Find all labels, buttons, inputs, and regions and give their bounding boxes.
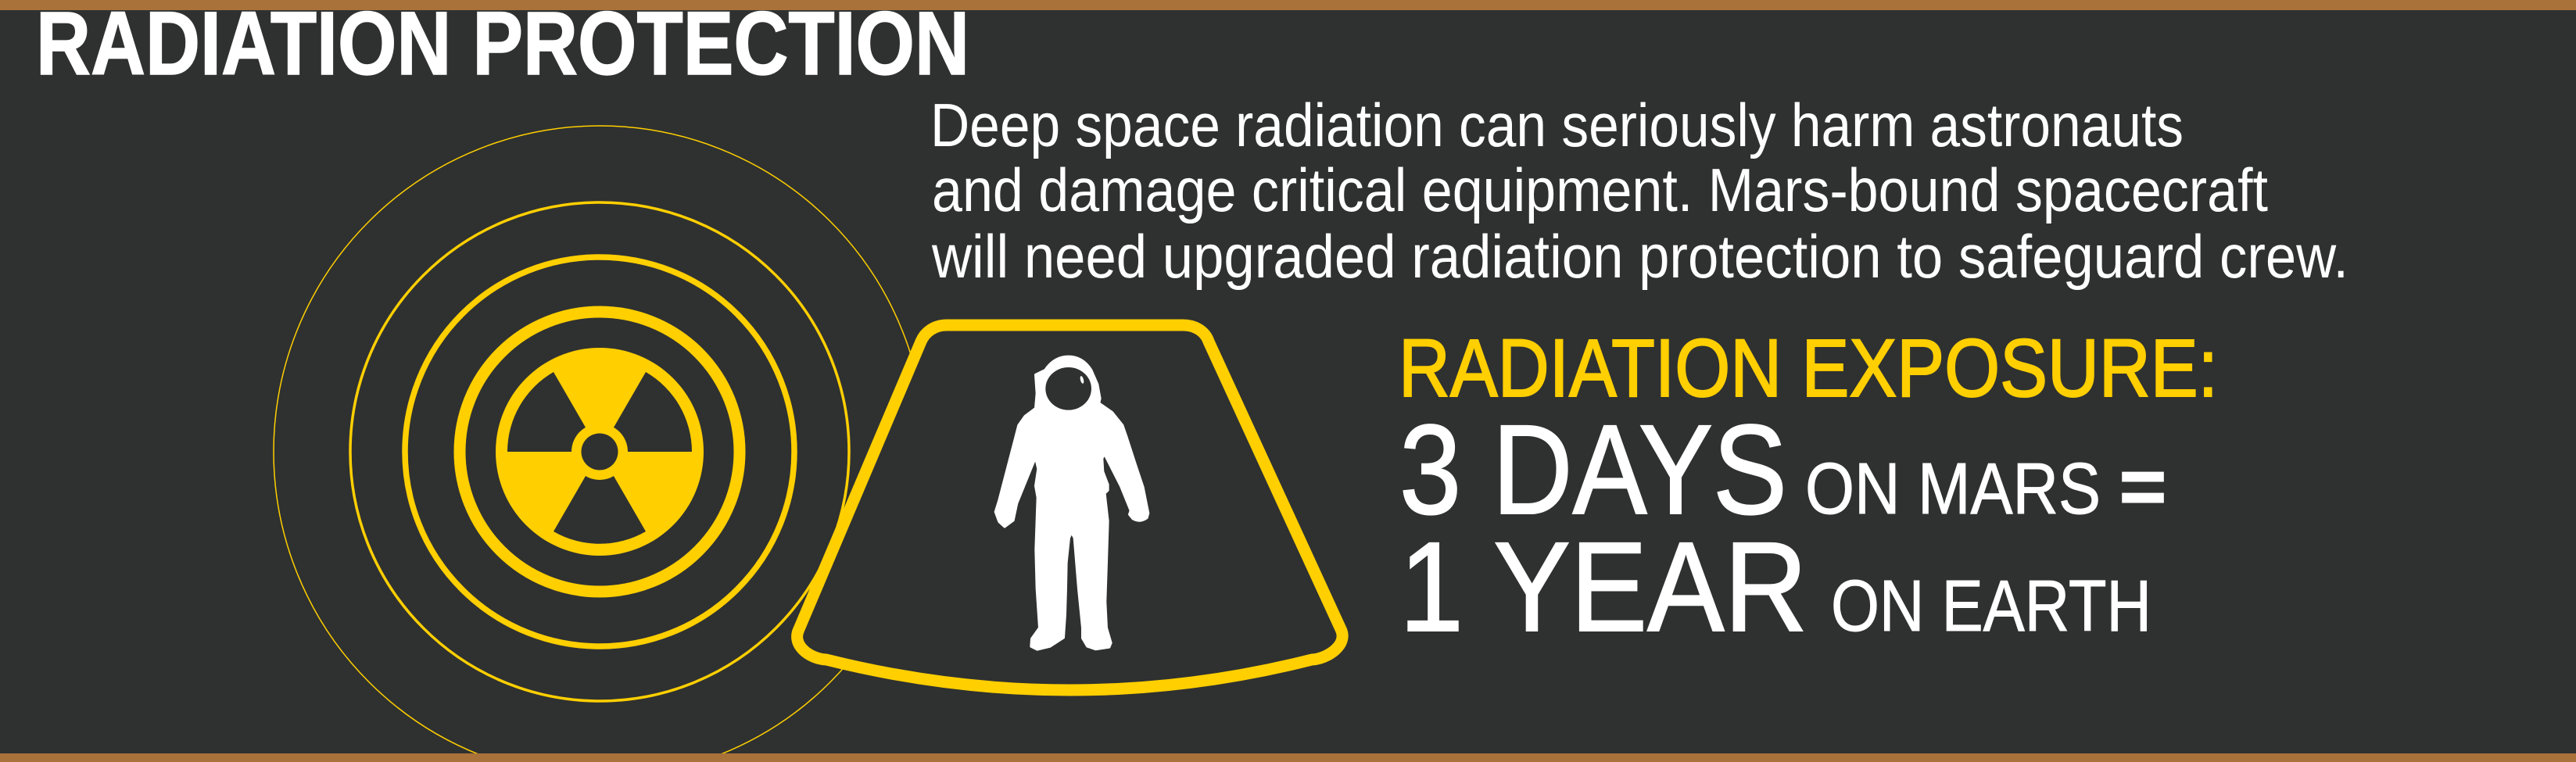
icon: radiation trefoil <box>496 348 704 556</box>
intro text: will need upgraded radiation protection to safeguard crew. <box>931 222 2348 291</box>
icon: astronaut <box>995 356 1148 649</box>
stat: 1 year on earth <box>1399 515 2151 658</box>
heading: radiation exposure: RADIATION EXPOSURE: <box>1399 323 2218 414</box>
bottom border bar <box>0 753 2576 762</box>
stat: 3 days on mars <box>1399 398 2166 541</box>
shield outline <box>797 325 1342 690</box>
intro text: and damage critical equipment. Mars-bound spacecraft <box>932 156 2268 224</box>
stat: 1 year on earth: ON EARTH <box>1831 565 2151 646</box>
stat: 1 year on earth: 1 YEAR <box>1399 515 1807 658</box>
radiation rings <box>274 126 926 762</box>
stat: 3 days on mars: ON MARS <box>1805 448 2101 529</box>
top border bar <box>0 0 2576 10</box>
intro text: Deep space radiation can seriously harm astronauts <box>930 91 2184 159</box>
intro text <box>930 91 2348 291</box>
stat: 3 days on mars: 3 DAYS <box>1399 398 1787 541</box>
stat: 3 days on mars: = <box>2119 443 2166 531</box>
